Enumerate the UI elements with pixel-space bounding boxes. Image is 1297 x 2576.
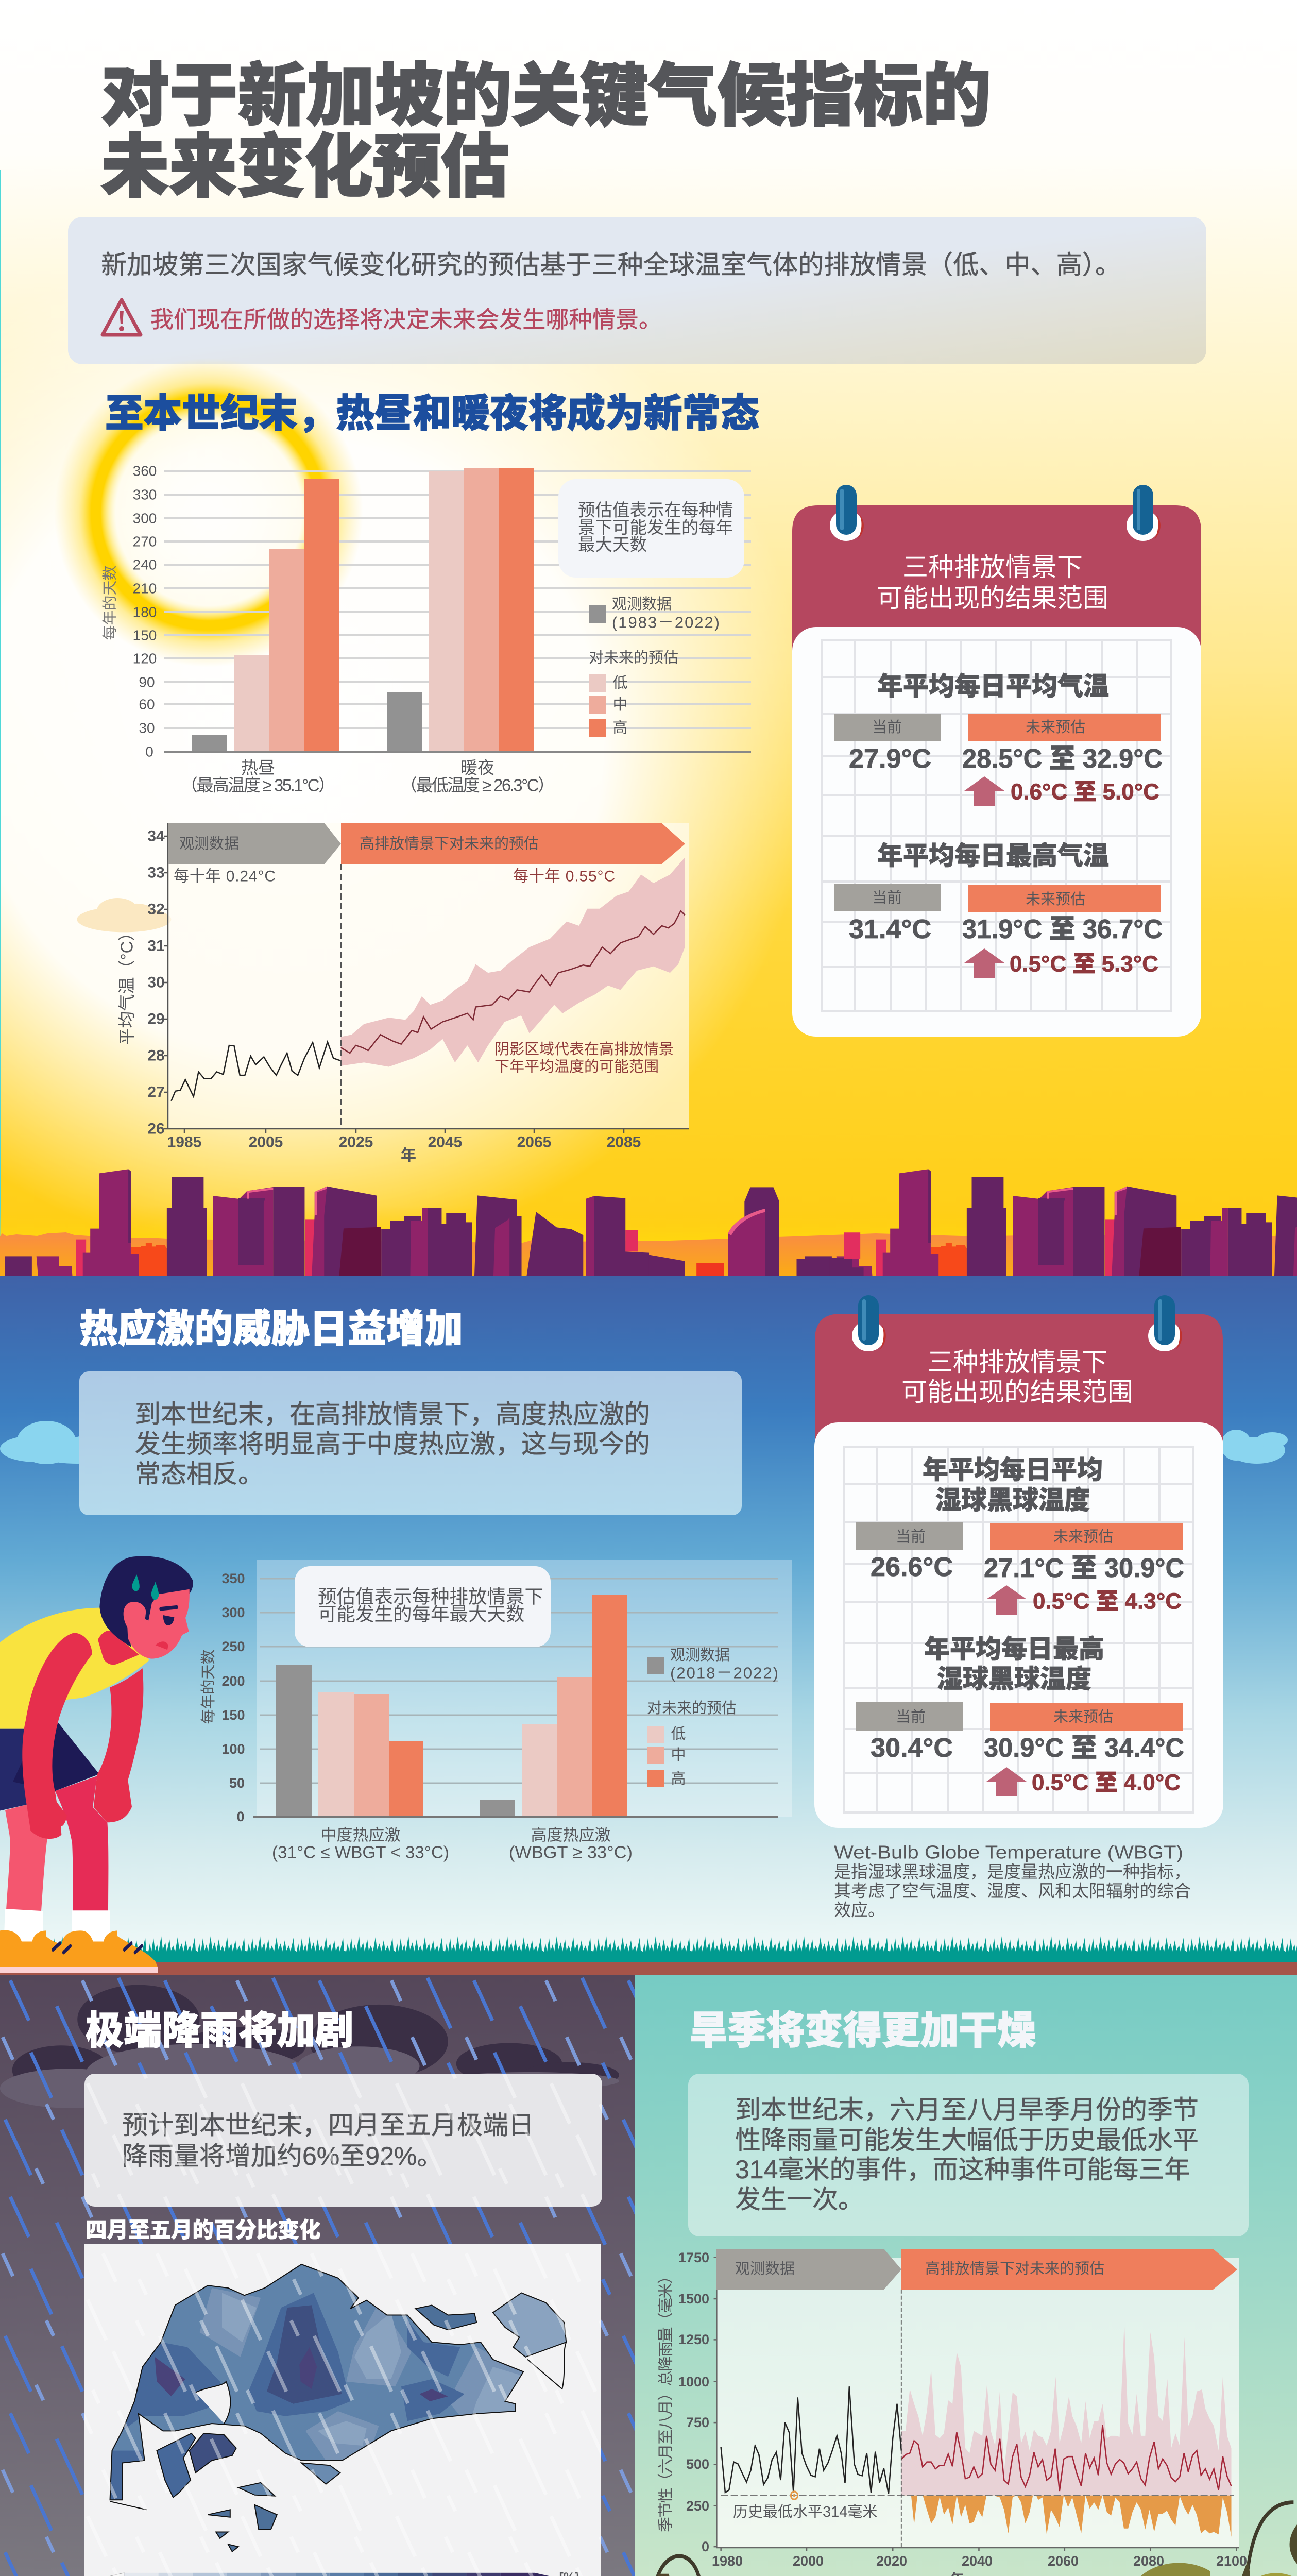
category label: high: [509, 1826, 633, 1862]
block: max WBGT: 30.4°C: [871, 1733, 953, 1763]
line chart: mean temperature: 32: [147, 901, 165, 918]
category label: hot days: （最高温度 ≥ 35.1°C）: [181, 776, 335, 794]
background: white glow around charts: [0, 232, 814, 1262]
line chart: mean temperature: 30: [147, 974, 165, 991]
note box: 最大天数: [578, 536, 647, 554]
category label: warm nights: （最低温度 ≥ 26.3°C）: [400, 776, 555, 794]
panel: rainfall text: [84, 2074, 602, 2207]
block: mean temperature: 未来预估: [1026, 719, 1085, 736]
block: max temperature: 当前: [872, 889, 902, 906]
WBGT footnote: 效应。: [834, 1900, 885, 1920]
block: max temperature: [834, 841, 1163, 978]
projected range: [901, 2323, 1232, 2496]
legend: 观测数据: [670, 1647, 730, 1664]
legend: (2018－2022): [670, 1664, 778, 1682]
icon: small cloud: [77, 898, 171, 932]
arrow header: projection: [341, 823, 685, 864]
panel: rainfall text: 降雨量将增加约6%至92%。: [122, 2142, 442, 2171]
line chart: mean temperature: [117, 823, 689, 1164]
legend: 中: [612, 696, 628, 713]
block: max WBGT: 未来预估: [1053, 1708, 1113, 1725]
WBGT footnote: [834, 1841, 1191, 1920]
title: [101, 58, 991, 206]
legend: (1983－2022): [612, 613, 720, 632]
line chart: seasonal rainfall: [657, 2249, 1247, 2576]
sub-heading: map: 四月至五月的百分比变化: [86, 2217, 321, 2242]
block: max WBGT: 0.5°C 至 4.0°C: [1032, 1770, 1181, 1795]
colorbar: [105, 2573, 555, 2576]
decorative sun ring: [54, 358, 363, 667]
bar chart: heat stress: 50: [229, 1775, 245, 1791]
legend: 对未来的预估: [589, 649, 678, 666]
line chart: seasonal rainfall: 1000: [678, 2374, 709, 2389]
block: max temperature: 未来预估: [1026, 891, 1085, 908]
skyline: [0, 1169, 1297, 1277]
arrow header: projection: 高排放情景下对未来的预估: [925, 2260, 1104, 2277]
line chart: mean temperature: 26: [147, 1120, 165, 1138]
arrow header: observed: [716, 2249, 901, 2290]
block: max temperature: 年平均每日最高气温: [877, 841, 1109, 870]
line chart: seasonal rainfall: 2020: [876, 2553, 907, 2569]
line chart: mean temperature: 31: [147, 938, 165, 954]
line chart: seasonal rainfall: 1980: [712, 2553, 743, 2569]
WBGT footnote: Wet-Bulb Globe Temperature (WBGT): [834, 1841, 1183, 1863]
arrow header: projection: [901, 2249, 1237, 2290]
map: main island contours: [106, 2259, 530, 2505]
line chart: mean temperature: 年: [401, 1147, 416, 1164]
line chart: seasonal rainfall: 2080: [1133, 2553, 1164, 2569]
note box: [295, 1566, 551, 1647]
line chart: seasonal rainfall: 1250: [678, 2332, 709, 2347]
legend: 对未来的预估: [647, 1700, 737, 1717]
panel: dry season text: [688, 2074, 1249, 2236]
calendar panel: temperature ranges: 三种排放情景下: [902, 553, 1083, 582]
calendar panel: WBGT ranges: 可能出现的结果范围: [901, 1378, 1133, 1406]
line chart: mean temperature: 2025: [339, 1133, 373, 1151]
block: mean WBGT: [856, 1455, 1184, 1615]
bar chart: hot days and warm nights: 360: [133, 463, 157, 479]
panel: dry season text: 发生一次。: [735, 2185, 864, 2214]
block: mean temperature: 当前: [872, 719, 902, 736]
block: max WBGT: [856, 1635, 1184, 1796]
icon: clouds right: [1221, 1430, 1288, 1464]
line chart: seasonal rainfall: 2100: [1216, 2553, 1247, 2569]
intro text: 新加坡第三次国家气候变化研究的预估基于三种全球温室气体的排放情景（低、中、高）。: [101, 250, 1121, 279]
plant: right: [1233, 2502, 1297, 2576]
legend: 低: [671, 1725, 686, 1742]
illustration: storm clouds: [0, 1985, 619, 2108]
illustration: dry land: [635, 2563, 1297, 2576]
block: max WBGT: 湿球黑球温度: [937, 1665, 1091, 1693]
middle buildings: [648, 1187, 864, 1276]
bar chart: hot days and warm nights: 210: [133, 580, 157, 597]
line chart: mean temperature: 33: [147, 865, 165, 881]
calendar panel: WBGT ranges: [814, 1295, 1223, 1828]
bar chart: hot days and warm nights: 90: [139, 674, 155, 690]
title: 对于新加坡的关键气候指标的: [101, 58, 991, 134]
trend annotation: observed: 每十年 0.24°C: [174, 868, 276, 885]
annotation: historic low: 历史最低水平314毫米: [733, 2503, 877, 2520]
bar chart: heat stress: 350: [221, 1571, 245, 1586]
block: max WBGT: 年平均每日最高: [924, 1635, 1104, 1664]
bars: warm nights: [387, 468, 534, 752]
bar chart: heat stress: 0: [236, 1809, 245, 1824]
block: max temperature: 0.5°C 至 5.3°C: [1010, 951, 1158, 977]
line chart: mean temperature: 2085: [607, 1133, 641, 1151]
axis title: 每年的天数: [101, 565, 118, 640]
arrow header: observed: 观测数据: [179, 835, 239, 852]
block: mean temperature: [834, 672, 1163, 806]
projection band: [171, 857, 685, 1101]
panel: heat stress text: 到本世纪末，在高排放情景下，高度热应激的: [135, 1400, 650, 1429]
arrow header: projection: 高排放情景下对未来的预估: [360, 835, 539, 852]
category label: high: (WBGT ≥ 33°C): [509, 1842, 633, 1862]
panel: heat stress text: 常态相反。: [135, 1460, 264, 1488]
legend: 观测数据: [612, 596, 672, 613]
note box: 预估值表示每种排放情景下: [318, 1586, 543, 1607]
bar chart: hot days and warm nights: [101, 463, 751, 794]
bars: moderate: [276, 1665, 423, 1817]
map: offshore islands: [110, 2293, 566, 2552]
illustration: exhausted runner: [0, 1556, 193, 1973]
calendar panel: temperature ranges: [792, 485, 1201, 1037]
illustration: wilted plants: [650, 2502, 1297, 2576]
bar chart: hot days and warm nights: 330: [133, 486, 157, 503]
bar chart: hot days and warm nights: 60: [139, 697, 155, 712]
bar chart: heat stress: 250: [221, 1639, 245, 1654]
line chart: mean temperature: 27: [147, 1084, 165, 1100]
bars: high: [480, 1595, 627, 1817]
category label: high: 高度热应激: [531, 1826, 611, 1844]
line chart: mean temperature: 2005: [249, 1133, 283, 1151]
line chart: seasonal rainfall: 250: [686, 2498, 709, 2514]
warning text: 我们现在所做的选择将决定未来会发生哪种情景。: [150, 306, 662, 333]
block: mean temperature: 27.9°C: [849, 744, 931, 774]
bar chart: hot days and warm nights: 300: [133, 510, 157, 527]
axis title: 每年的天数: [200, 1649, 217, 1724]
bar chart: heat stress: 200: [221, 1673, 245, 1689]
block: mean WBGT: 当前: [896, 1528, 926, 1545]
bar chart: hot days and warm nights: 240: [133, 556, 157, 573]
legend: 中: [671, 1747, 686, 1764]
line chart: seasonal rainfall: 0: [702, 2539, 709, 2554]
block: max WBGT: 当前: [896, 1708, 926, 1725]
block: mean temperature: 28.5°C 至 32.9°C: [962, 744, 1163, 774]
bar chart: hot days and warm nights: 30: [139, 720, 155, 736]
bar chart: heat stress: 300: [221, 1605, 245, 1620]
bar chart: heat stress: 100: [221, 1741, 245, 1757]
panel: dry season text: 314毫米的事件，而这种事件可能每三年: [735, 2155, 1190, 2184]
WBGT footnote: 其考虑了空气温度、湿度、风和太阳辐射的综合: [834, 1882, 1191, 1900]
note box: 预估值表示在每种情: [578, 501, 733, 520]
ground strip with grass: [0, 1936, 1297, 1975]
shading note: [494, 1041, 674, 1075]
block: max temperature: 31.4°C: [849, 914, 931, 944]
legend: 高: [671, 1770, 686, 1787]
axis title: 平均气温（°C）: [117, 924, 136, 1045]
legend: [647, 1647, 778, 1787]
bar chart: hot days and warm nights: 150: [133, 628, 157, 643]
note box: [558, 479, 744, 578]
line chart: mean temperature: 34: [147, 827, 165, 845]
section background: heat stress: [0, 1276, 1297, 1951]
block: mean WBGT: 未来预估: [1053, 1528, 1113, 1545]
heading: extreme rainfall: 极端降雨将加剧: [86, 2009, 353, 2052]
block: mean WBGT: 26.6°C: [871, 1552, 953, 1582]
bar chart: hot days and warm nights: 0: [145, 744, 153, 759]
trend annotation: projected: 每十年 0.55°C: [513, 868, 615, 885]
category label: moderate: (31°C ≤ WBGT < 33°C): [272, 1842, 449, 1862]
heading: heat stress: 热应激的威胁日益增加: [79, 1307, 463, 1350]
bar chart: heat stress: 150: [221, 1707, 245, 1723]
note box: 可能发生的每年最大天数: [318, 1603, 524, 1625]
line chart: mean temperature: 2065: [517, 1133, 551, 1151]
bushes: [1065, 2563, 1297, 2576]
map panel: Singapore rainfall change: [84, 2244, 601, 2576]
heading: dry season: 旱季将变得更加干燥: [689, 2009, 1036, 2052]
block: max temperature: 31.9°C 至 36.7°C: [962, 914, 1163, 944]
line chart: seasonal rainfall: 500: [686, 2456, 709, 2472]
line chart: seasonal rainfall: 2000: [793, 2553, 824, 2569]
arrow header: observed: 观测数据: [735, 2260, 795, 2277]
panel: rainfall text: 预计到本世纪末，四月至五月极端日: [122, 2111, 534, 2140]
panel: dry season text: 到本世纪末，六月至八月旱季月份的季节: [735, 2095, 1199, 2124]
panel: heat stress text: [79, 1371, 742, 1515]
block: mean WBGT: 湿球黑球温度: [935, 1486, 1090, 1515]
category label: hot days: [181, 758, 335, 794]
line chart: seasonal rainfall: 1500: [678, 2291, 709, 2307]
legend: 高: [612, 719, 628, 736]
line chart: seasonal rainfall: 2040: [962, 2553, 993, 2569]
line chart: mean temperature: 2045: [428, 1133, 462, 1151]
panel: intro: [68, 217, 1206, 364]
block: mean WBGT: 27.1°C 至 30.9°C: [984, 1553, 1184, 1583]
bar chart: hot days and warm nights: 180: [133, 604, 157, 620]
block: mean WBGT: 0.5°C 至 4.3°C: [1033, 1589, 1182, 1614]
category label: moderate: 中度热应激: [320, 1826, 401, 1844]
legend: [589, 596, 720, 737]
line chart: mean temperature: 28: [147, 1047, 165, 1064]
bar chart: heat stress: [200, 1560, 792, 1862]
line chart: seasonal rainfall: 2060: [1048, 2553, 1079, 2569]
line chart: mean temperature: 29: [147, 1011, 165, 1027]
white rain over panels: [84, 2074, 602, 2576]
bars: hot days: [192, 479, 339, 752]
block: mean temperature: 年平均每日平均气温: [877, 672, 1109, 701]
section background: heat: [0, 0, 1297, 1277]
heading: hot days and warm nights: 至本世纪末，热昼和暖夜将成为新常态: [105, 392, 759, 435]
orange: below historic low: [905, 2496, 1231, 2537]
bar chart: hot days and warm nights: 120: [133, 650, 157, 667]
rain: [0, 1975, 635, 2576]
title: 未来变化预估: [101, 129, 509, 206]
plant: left: [650, 2556, 714, 2576]
WBGT footnote: 是指湿球黑球温度，是度量热应激的一种指标，: [834, 1862, 1191, 1882]
block: mean temperature: 0.6°C 至 5.0°C: [1011, 779, 1159, 805]
category label: moderate: [272, 1826, 449, 1862]
block: mean WBGT: 年平均每日平均: [923, 1455, 1103, 1484]
panel: dry season text: 性降雨量可能发生大幅低于历史最低水平: [735, 2126, 1199, 2155]
shading note: 下年平均温度的可能范围: [494, 1058, 659, 1075]
axes: [164, 823, 689, 1133]
legend: 低: [612, 674, 628, 691]
line chart: mean temperature: 1985: [167, 1133, 201, 1151]
panel: heat stress text: 发生频率将明显高于中度热应激，这与现今的: [135, 1430, 650, 1459]
calendar panel: temperature ranges: 可能出现的结果范围: [877, 584, 1108, 613]
icon: clouds left: [0, 1421, 124, 1464]
block: max WBGT: 30.9°C 至 34.4°C: [984, 1733, 1184, 1763]
category label: warm nights: [400, 758, 555, 794]
icon: warning triangle: [103, 300, 141, 335]
category label: warm nights: 暖夜: [460, 758, 494, 777]
calendar panel: WBGT ranges: 三种排放情景下: [927, 1348, 1107, 1377]
category label: hot days: 热昼: [241, 758, 275, 777]
bar chart: hot days and warm nights: 270: [133, 534, 157, 549]
shading note: 阴影区域代表在高排放情景: [494, 1041, 674, 1058]
line chart: seasonal rainfall: 1750: [678, 2250, 709, 2265]
axis title: 季节性（六月至八月）总降雨量（毫米）: [657, 2268, 675, 2532]
section background: extreme rainfall: [0, 1975, 635, 2576]
note box: 景下可能发生的每年: [578, 518, 733, 538]
line chart: seasonal rainfall: 750: [686, 2415, 709, 2430]
arrow header: observed: [168, 823, 341, 864]
section background: drier dry season: [635, 1975, 1297, 2576]
accent line at left edge: [0, 170, 1, 1277]
